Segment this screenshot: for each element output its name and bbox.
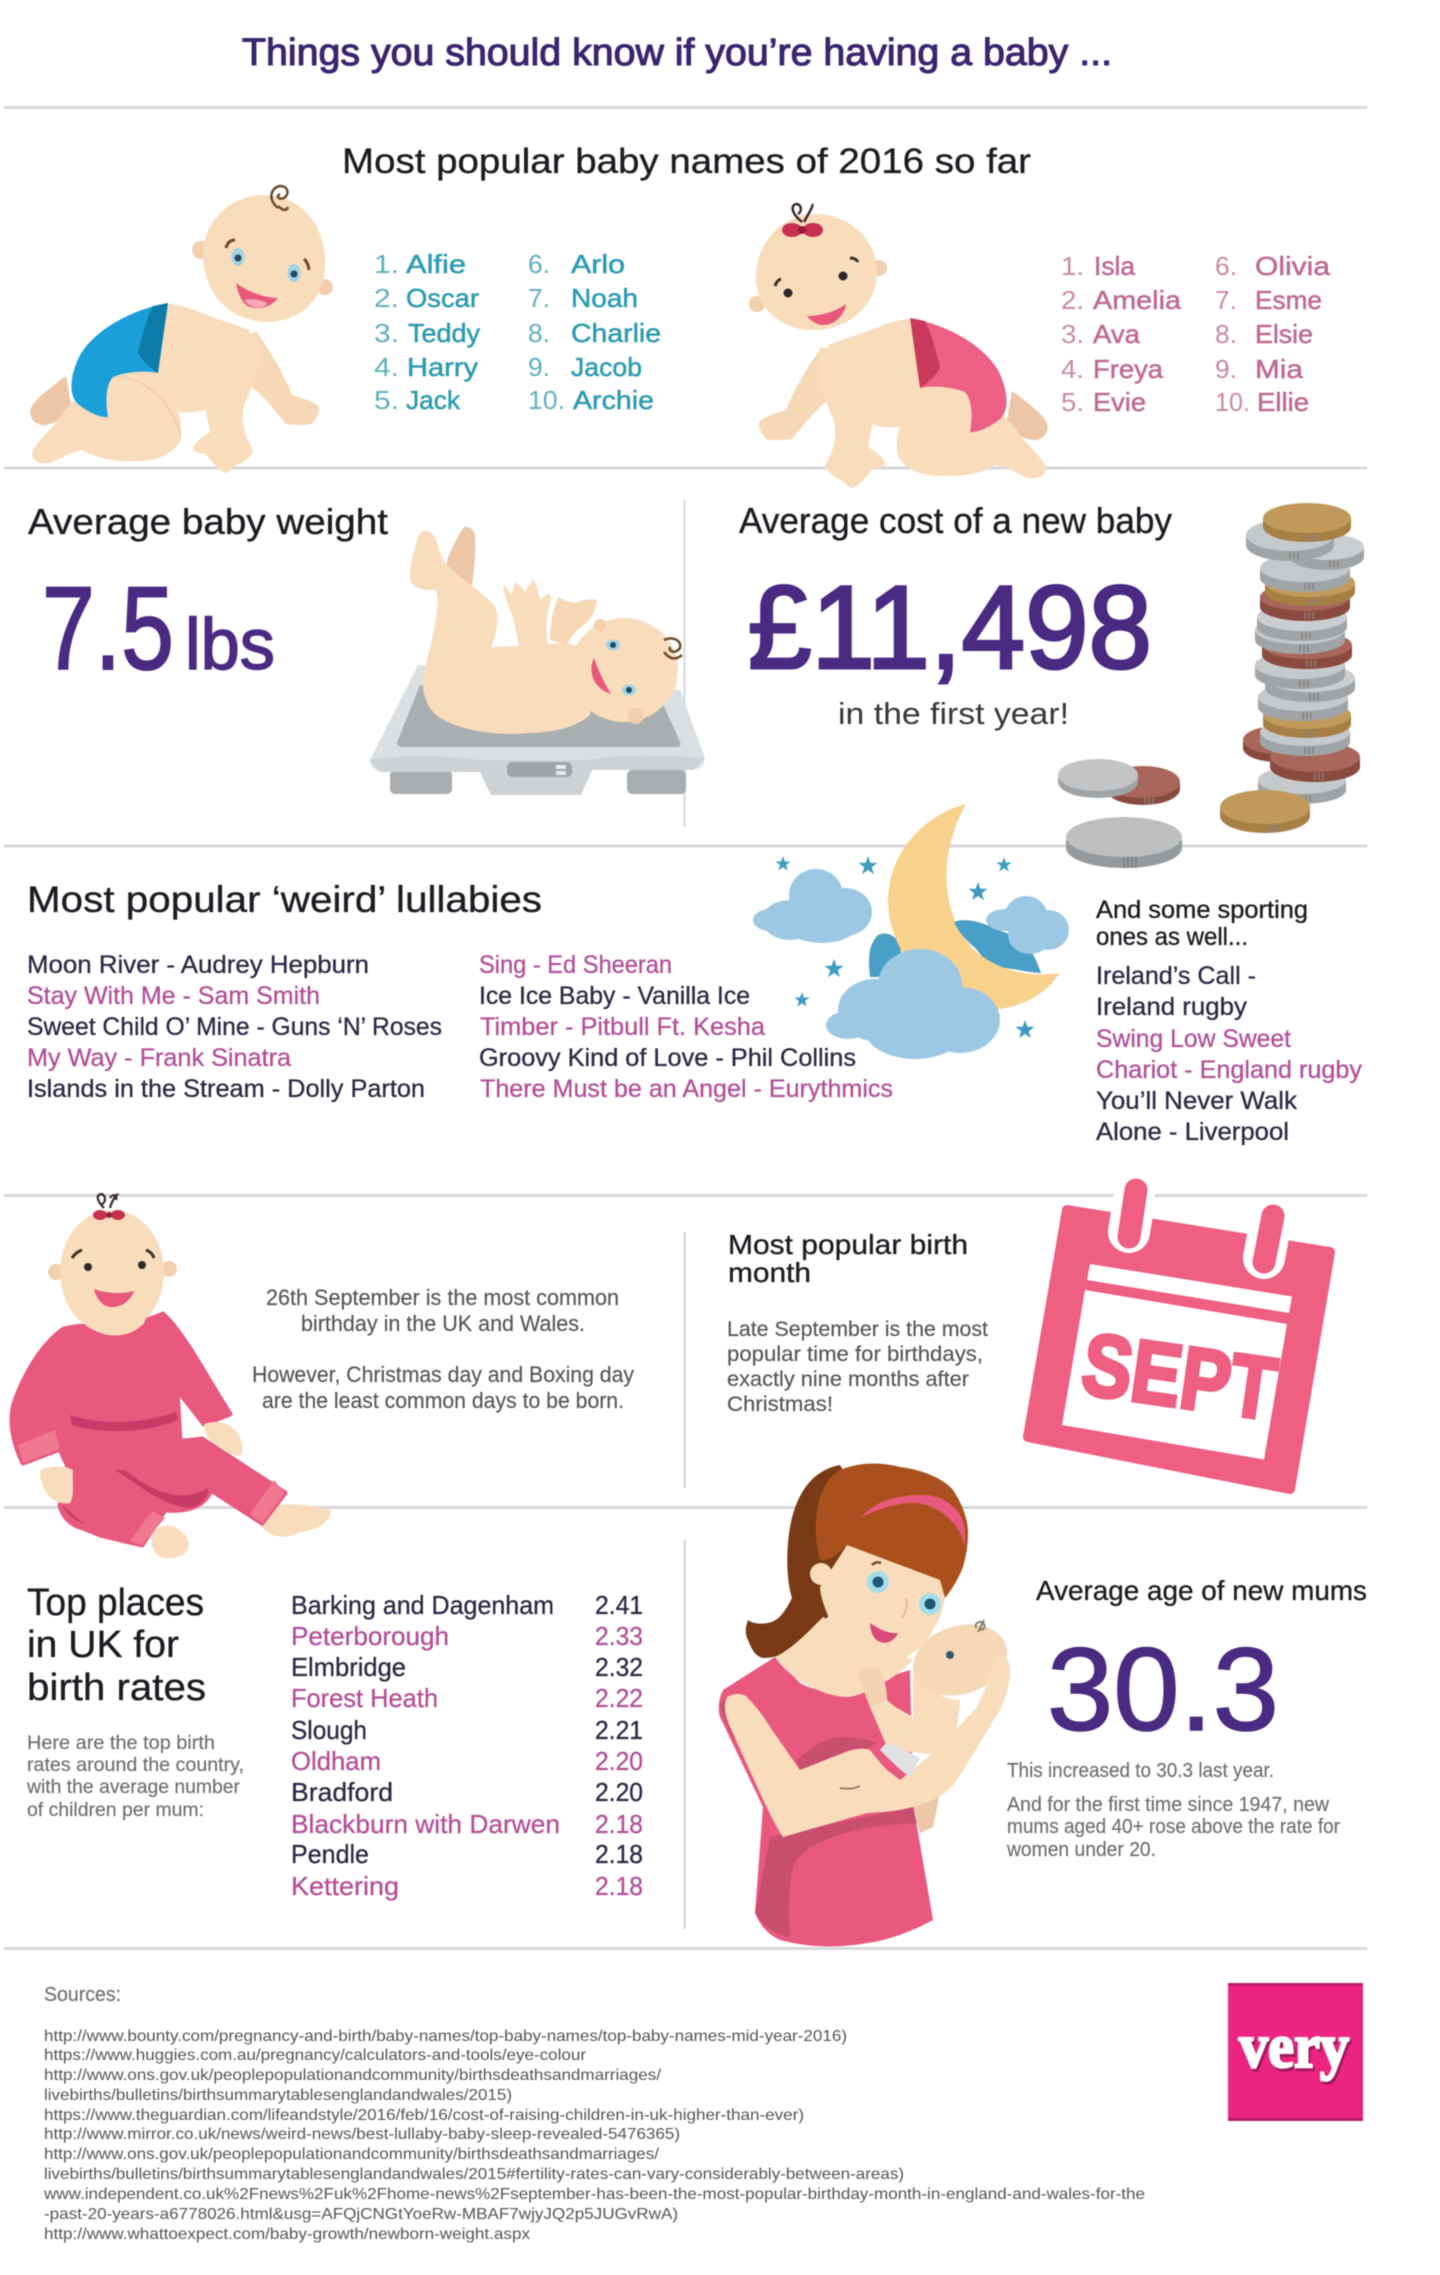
- heading: baby names: Most popular baby names of 2016 so far: [342, 142, 1031, 181]
- panel: baby names: [30, 142, 1331, 488]
- girl names list: Olivia: [1255, 251, 1331, 281]
- icon: crawling baby boy: [30, 186, 333, 473]
- birth rate table: 2.21: [595, 1715, 643, 1745]
- icon: mum holding baby: [719, 1464, 1016, 1946]
- sources list: http://www.ons.gov.uk/peoplepopulationandcommunity/birthsdeathsandmarriages/: [44, 2067, 662, 2084]
- birth rate table: Pendle: [291, 1839, 369, 1869]
- girl names list: 5.: [1061, 387, 1084, 417]
- text: mums age detail: [1006, 1760, 1340, 1861]
- text: late September: popular time for birthdays,: [727, 1343, 983, 1366]
- sources list: http://www.whattoexpect.com/baby-growth/newborn-weight.aspx: [44, 2226, 530, 2243]
- lullaby list column 2: [479, 951, 893, 1103]
- boy names list: 1.: [374, 249, 399, 279]
- sources list: [43, 2028, 1145, 2243]
- girl names list: Mia: [1255, 354, 1304, 384]
- birth rate table: Bradford: [291, 1777, 393, 1807]
- lullaby list column 2: Groovy Kind of Love - Phil Collins: [479, 1044, 856, 1072]
- birth rate table: Peterborough: [291, 1621, 449, 1651]
- text: mums age detail: women under 20.: [1006, 1839, 1156, 1861]
- stat: cost: £11,498: [748, 562, 1152, 694]
- sporting lullabies: And some sporting: [1096, 896, 1308, 924]
- stat: 7.5 lbs: 7.5: [42, 563, 174, 695]
- boy names list: 9.: [528, 352, 550, 382]
- birth rate table: Blackburn with Darwen: [291, 1809, 560, 1839]
- girl names list: 1.: [1061, 251, 1084, 281]
- sources list: livebirths/bulletins/birthsummarytablesenglandandwales/2015): [44, 2087, 512, 2104]
- text: top places intro: rates around the country,: [27, 1755, 244, 1776]
- girl names list: Ellie: [1257, 387, 1309, 417]
- stat: 30.3: 30.3: [1047, 1624, 1279, 1756]
- birth rate table: 2.32: [595, 1652, 643, 1682]
- sources list: https://www.huggies.com.au/pregnancy/calculators-and-tools/eye-colour: [44, 2047, 587, 2064]
- birth rate table: Oldham: [291, 1746, 381, 1776]
- boy names list: 3.: [374, 318, 399, 348]
- girl names list: 6.: [1215, 251, 1237, 281]
- text: late September: exactly nine months after: [727, 1368, 969, 1391]
- sporting lullabies: [1096, 896, 1362, 1146]
- panel: most common birthday: [12, 1194, 634, 1558]
- text: mums age detail: This increased to 30.3 last year.: [1007, 1760, 1274, 1782]
- birth rate table: 2.20: [595, 1746, 643, 1776]
- sporting lullabies: Alone - Liverpool: [1096, 1118, 1289, 1146]
- birth rate table: [291, 1590, 643, 1901]
- boy names list: Noah: [571, 283, 638, 313]
- sources list: https://www.theguardian.com/lifeandstyle/2016/feb/16/cost-of-raising-children-in-uk-higher-than-ever): [44, 2107, 804, 2124]
- panel: average cost of a new baby: [739, 500, 1364, 868]
- boy names list: 6.: [528, 249, 550, 279]
- text: top places intro: with the average number: [26, 1777, 241, 1798]
- heading: birth month: Most popular birth: [728, 1229, 968, 1260]
- girl names list: 7.: [1215, 285, 1237, 315]
- icon: baby on scales: [370, 527, 705, 795]
- sporting lullabies: Ireland’s Call -: [1096, 962, 1256, 990]
- heading: top places: [27, 1582, 206, 1709]
- boy names list: 8.: [528, 318, 550, 348]
- boy names list: 7.: [528, 283, 550, 313]
- birth rate table: 2.18: [595, 1839, 643, 1869]
- heading: birth month: month: [728, 1257, 811, 1288]
- birth rate table: Kettering: [291, 1871, 399, 1901]
- heading: top places: in UK for: [27, 1624, 179, 1666]
- boy names list: Charlie: [571, 318, 661, 348]
- text: mums age detail: mums aged 40+ rose above the rate for: [1007, 1816, 1340, 1838]
- girl names list: 3.: [1061, 319, 1084, 349]
- girl names list: 10.: [1215, 387, 1250, 417]
- sporting lullabies: Ireland rugby: [1096, 993, 1248, 1021]
- sporting lullabies: Swing Low Sweet: [1096, 1025, 1291, 1053]
- sporting lullabies: ones as well...: [1096, 923, 1248, 951]
- icon: loose coins: [1058, 759, 1310, 868]
- panel: most popular birth month: [727, 1190, 1330, 1489]
- icon: coin stack: [1243, 503, 1364, 804]
- birth rate table: Elmbridge: [291, 1652, 406, 1682]
- boy names list: Harry: [407, 352, 478, 382]
- boy names list: 5.: [374, 385, 399, 415]
- birth rate table: Barking and Dagenham: [291, 1590, 554, 1620]
- caption: in the first year: in the first year!: [838, 696, 1069, 731]
- logo: very: very: [1239, 2013, 1349, 2081]
- text: 26th September: birthday in the UK and Wales.: [301, 1311, 585, 1336]
- icon: moon clouds and stars: [753, 804, 1069, 1059]
- boy names list: Archie: [573, 385, 654, 415]
- heading: lullabies: Most popular ‘weird’ lullabies: [27, 879, 542, 920]
- girl names list: 8.: [1215, 319, 1237, 349]
- icon: sitting baby girl: [12, 1194, 330, 1558]
- lullaby list column 1: Sweet Child O’ Mine - Guns ‘N’ Roses: [27, 1013, 442, 1041]
- lullaby list column 2: There Must be an Angel - Eurythmics: [480, 1075, 893, 1103]
- text: 26th September: are the least common days to be born.: [262, 1388, 624, 1413]
- birth rate table: 2.18: [595, 1871, 643, 1901]
- lullaby list column 1: Islands in the Stream - Dolly Parton: [27, 1075, 425, 1103]
- boy names list: Oscar: [406, 283, 479, 313]
- icon: crawling baby girl: [749, 204, 1048, 488]
- sporting lullabies: Chariot - England rugby: [1096, 1056, 1362, 1084]
- stat: 7.5 lbs: lbs: [185, 605, 275, 685]
- heading: birth month: [728, 1229, 968, 1288]
- birth rate table: 2.20: [595, 1777, 643, 1807]
- heading: average baby weight: Average baby weight: [28, 501, 388, 542]
- text: top places intro: Here are the top birth: [27, 1733, 215, 1754]
- title: Things you should know if you’re having a baby ...: [242, 32, 1112, 74]
- sources list: www.independent.co.uk%2Fnews%2Fuk%2Fhome-news%2Fseptember-has-been-the-most-popular-birthday-month-in-england-and-wales-for-the: [43, 2186, 1145, 2203]
- heading: top places: Top places: [27, 1582, 204, 1624]
- girl names list: [1061, 251, 1331, 417]
- girl names list: Elsie: [1255, 319, 1313, 349]
- text: 26th September: 26th September is the most common: [266, 1285, 619, 1310]
- sources list: http://www.ons.gov.uk/peoplepopulationandcommunity/birthsdeathsandmarriages/: [44, 2146, 660, 2163]
- lullaby list column 1: [27, 951, 442, 1103]
- text: late September: [727, 1318, 988, 1416]
- panel: weird lullabies: [27, 804, 1362, 1146]
- text: late September: Late September is the most: [727, 1318, 988, 1341]
- sources heading: Sources:: [44, 1984, 121, 2006]
- girl names list: 9.: [1215, 354, 1237, 384]
- text: 26th September: However, Christmas day and Boxing day: [252, 1362, 634, 1387]
- lullaby list column 2: Ice Ice Baby - Vanilla Ice: [479, 982, 750, 1010]
- boy names list: Arlo: [571, 249, 625, 279]
- heading: top places: birth rates: [27, 1667, 206, 1709]
- boy names list: Jacob: [571, 352, 642, 382]
- birth rate table: 2.18: [595, 1809, 643, 1839]
- girl names list: Evie: [1093, 387, 1146, 417]
- text: mums age detail: And for the first time since 1947, new: [1007, 1794, 1330, 1816]
- text: 26th September: [252, 1285, 634, 1413]
- text: late September: Christmas!: [727, 1393, 833, 1416]
- boy names list: [374, 249, 661, 415]
- girl names list: 4.: [1061, 354, 1084, 384]
- icon: SEPT calendar: [1028, 1190, 1330, 1489]
- boy names list: 4.: [374, 352, 399, 382]
- birth rate table: 2.41: [595, 1590, 643, 1620]
- logo: very: [1228, 1983, 1363, 2121]
- logo: very: very: [1241, 2016, 1351, 2084]
- boy names list: 10.: [528, 385, 565, 415]
- panel: top places for birth rates: [26, 1582, 643, 1901]
- girl names list: Amelia: [1093, 285, 1182, 315]
- text: top places intro: [26, 1733, 244, 1821]
- boy names list: 2.: [374, 283, 399, 313]
- boy names list: Teddy: [408, 318, 480, 348]
- birth rate table: Slough: [291, 1715, 367, 1745]
- panel: average age of new mums: [719, 1464, 1367, 1946]
- text: top places intro: of children per mum:: [27, 1800, 204, 1821]
- sources list: livebirths/bulletins/birthsummarytablesenglandandwales/2015#fertility-rates-can-vary-considerably-between-areas): [44, 2166, 904, 2183]
- girl names list: 2.: [1061, 285, 1084, 315]
- sporting lullabies: You’ll Never Walk: [1096, 1087, 1298, 1115]
- icon: SEPT calendar: SEPT: [1076, 1314, 1282, 1439]
- boy names list: Alfie: [406, 249, 466, 279]
- lullaby list column 1: My Way - Frank Sinatra: [27, 1044, 291, 1072]
- panel: sources: [43, 1983, 1363, 2243]
- birth rate table: 2.33: [595, 1621, 643, 1651]
- heading: average age: Average age of new mums: [1036, 1575, 1367, 1606]
- lullaby list column 1: Moon River - Audrey Hepburn: [27, 951, 369, 979]
- girl names list: Esme: [1255, 285, 1322, 315]
- panel: average baby weight: [28, 501, 705, 795]
- boy names list: Jack: [406, 385, 461, 415]
- sources list: -past-20-years-a6778026.html&usg=AFQjCNGtYoeRw-MBAF7wjyJQ2p5JUGvRwA): [44, 2206, 678, 2223]
- lullaby list column 2: Sing - Ed Sheeran: [479, 951, 672, 979]
- birth rate table: 2.22: [595, 1683, 643, 1713]
- heading: average cost: Average cost of a new baby: [739, 500, 1172, 541]
- girl names list: Freya: [1093, 354, 1164, 384]
- sources list: http://www.mirror.co.uk/news/weird-news/best-lullaby-baby-sleep-revealed-5476365): [44, 2126, 680, 2143]
- lullaby list column 2: Timber - Pitbull Ft. Kesha: [480, 1013, 765, 1041]
- birth rate table: Forest Heath: [291, 1683, 438, 1713]
- girl names list: Isla: [1094, 251, 1136, 281]
- sources list: http://www.bounty.com/pregnancy-and-birth/baby-names/top-baby-names/top-baby-names-mid-year-2016): [44, 2028, 847, 2045]
- lullaby list column 1: Stay With Me - Sam Smith: [27, 982, 320, 1010]
- girl names list: Ava: [1093, 319, 1141, 349]
